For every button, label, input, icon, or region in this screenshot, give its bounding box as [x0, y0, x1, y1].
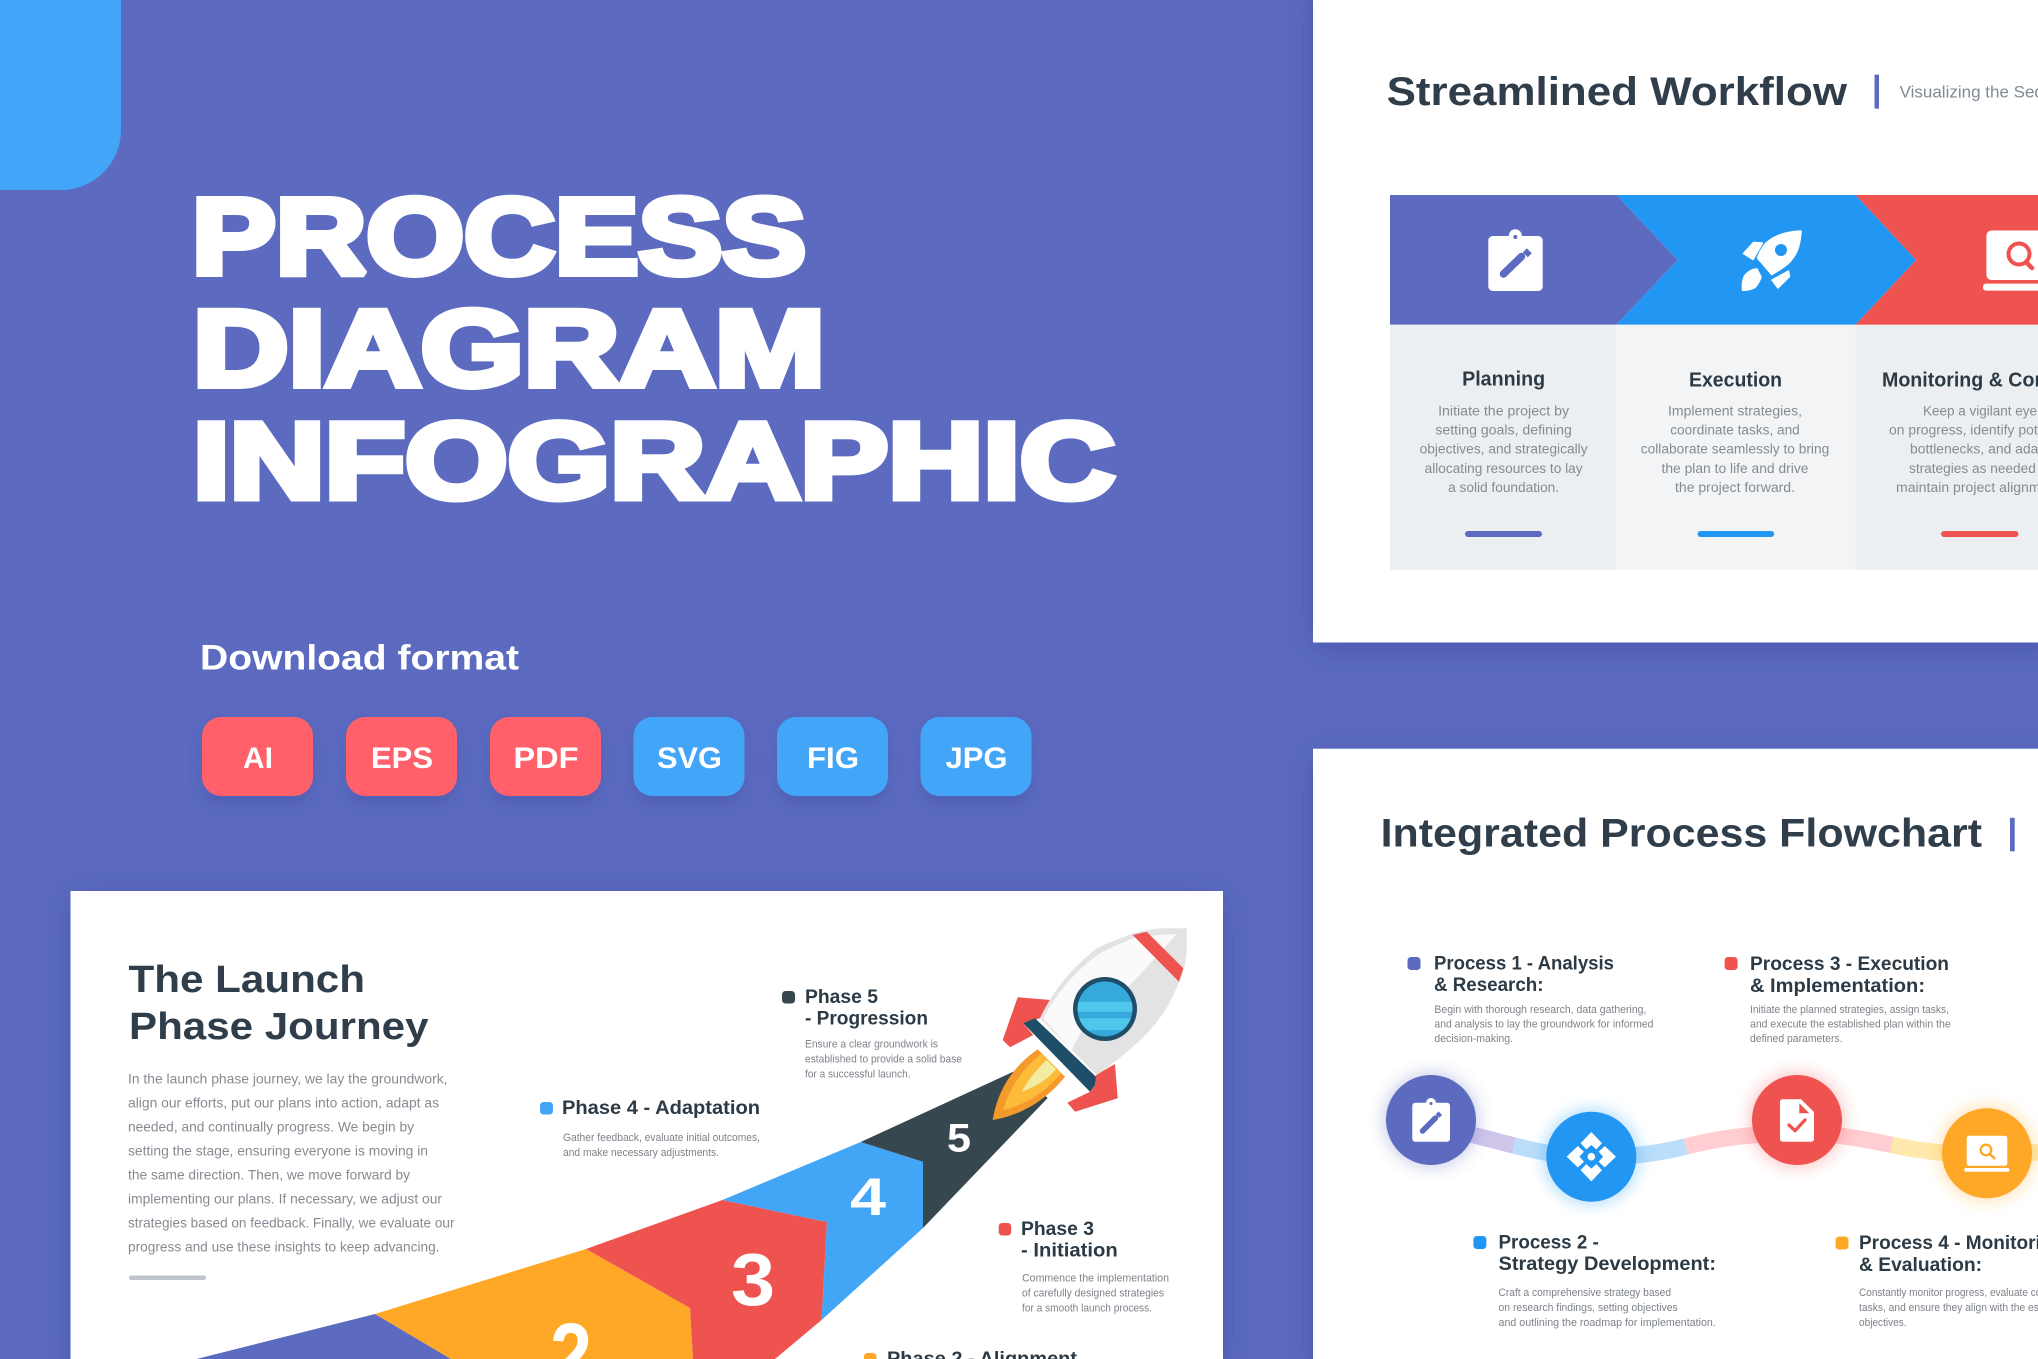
badge: PDF: PDF	[514, 742, 578, 775]
badge: SVG: SVG	[657, 742, 722, 775]
main title: DIAGRAM	[193, 288, 825, 408]
label: process 1: & Research:	[1434, 975, 1544, 996]
label: process 3: & Implementation:	[1750, 976, 1925, 997]
badge: PDF	[490, 717, 601, 796]
body text: setting the stage, ensuring everyone is moving in	[128, 1142, 428, 1158]
label: process 1: Process 1 - Analysis	[1434, 953, 1614, 974]
label: process 1: Begin with thorough research, data gathering,	[1434, 1004, 1646, 1016]
step: execution: the plan to life and drive	[1662, 461, 1808, 476]
label: process 4: & Evaluation:	[1859, 1255, 1982, 1276]
label: process 4: objectives.	[1859, 1317, 1907, 1329]
badge: JPG	[920, 717, 1032, 796]
step: execution	[1641, 369, 1829, 537]
corner accent	[0, 0, 121, 190]
label: process 2	[1473, 1232, 1716, 1329]
label: phase 3: for a smooth launch process.	[1022, 1302, 1152, 1314]
rocket body	[1040, 928, 1187, 1075]
number 3: 3	[731, 1238, 775, 1321]
rocket trail chart	[196, 1070, 1048, 1359]
rocket flame	[993, 1049, 1065, 1120]
main title	[192, 176, 1115, 521]
chevron: monitoring	[1856, 195, 2038, 325]
step: planning: objectives, and strategically	[1420, 442, 1588, 457]
label: process 2: Strategy Development:	[1498, 1254, 1716, 1275]
label: phase 4	[540, 1098, 760, 1159]
label: process 2: and outlining the roadmap for implementation.	[1498, 1317, 1716, 1329]
badge: EPS	[346, 717, 457, 796]
label: process 2: on research findings, setting objectives	[1498, 1302, 1678, 1314]
body text	[128, 1070, 455, 1254]
label: process 3: defined parameters.	[1750, 1033, 1842, 1045]
step: execution: the project forward.	[1675, 480, 1795, 495]
panel: streamlined workflow	[1313, 0, 2038, 642]
porthole	[1073, 977, 1137, 1041]
segment 1	[196, 1314, 451, 1359]
label: phase 5: for a successful launch.	[805, 1069, 910, 1081]
step: planning	[1420, 369, 1588, 537]
icon: clipboard	[1488, 229, 1543, 291]
label: process 3: Process 3 - Execution	[1750, 954, 1949, 975]
step: planning: allocating resources to lay	[1425, 461, 1583, 476]
badge: FIG	[777, 717, 888, 796]
label: process 3	[1725, 954, 1951, 1045]
badge: SVG	[634, 717, 744, 796]
panel heading: Streamlined Workflow	[1387, 70, 1848, 114]
body text: align our efforts, put our plans into action, adapt as	[128, 1094, 439, 1110]
body text: the same direction. Then, we move forward by	[128, 1166, 410, 1182]
label: process 1	[1408, 953, 1653, 1045]
number 4: 4	[850, 1168, 887, 1227]
rocket body highlight	[1043, 934, 1177, 1050]
segment 3	[586, 1200, 827, 1359]
label: phase 3: - Initiation	[1021, 1241, 1118, 1262]
step: execution: collaborate seamlessly to bring	[1641, 442, 1829, 457]
label: phase 5: Phase 5	[805, 987, 878, 1008]
segment 2	[375, 1249, 693, 1359]
download format heading: Download format	[200, 638, 519, 678]
label: process 1: decision-making.	[1434, 1033, 1513, 1045]
panel: launch phase journey	[70, 891, 1223, 1359]
body text: In the launch phase journey, we lay the groundwork,	[128, 1070, 448, 1086]
node 1: clipboard	[1386, 1075, 1476, 1165]
body text: progress and use these insights to keep advancing.	[128, 1238, 440, 1254]
segment 5	[861, 1070, 1048, 1228]
label: phase 3: Phase 3	[1021, 1219, 1094, 1240]
nose band	[1133, 932, 1183, 982]
chevron: execution	[1616, 195, 1916, 325]
label: phase 3: Commence the implementation	[1022, 1272, 1169, 1284]
body text: needed, and continually progress. We begin by	[128, 1118, 414, 1134]
label: process 2: Process 2 -	[1498, 1232, 1599, 1254]
accent bar	[129, 1276, 206, 1280]
main title: INFOGRAPHIC	[193, 400, 1115, 521]
icon: rocket	[1742, 231, 1801, 290]
number 5: 5	[947, 1116, 971, 1160]
label: phase 5: established to provide a solid base	[805, 1054, 962, 1066]
step: execution: Execution	[1689, 369, 1782, 391]
panel: integrated process flowchart	[1313, 749, 2038, 1359]
icon: rocket	[993, 928, 1187, 1120]
format badges	[202, 717, 1032, 796]
panel heading: Phase Journey	[129, 1006, 428, 1048]
heading divider	[1874, 75, 1879, 109]
chevron: planning	[1390, 195, 1678, 325]
step: monitoring and control: Keep a vigilant eye	[1923, 403, 2037, 418]
segment 4	[722, 1142, 923, 1320]
label: phase 4: and make necessary adjustments.	[563, 1147, 719, 1159]
label: process 1: and analysis to lay the groundwork for informed	[1434, 1018, 1653, 1030]
badge: AI: AI	[243, 742, 273, 775]
label: process 3: Initiate the planned strategies, assign tasks,	[1750, 1004, 1949, 1016]
panel heading: The Launch	[128, 959, 365, 1001]
node 2: diamonds	[1546, 1112, 1636, 1202]
label: phase 5: Ensure a clear groundwork is	[805, 1039, 938, 1051]
rocket base	[1023, 1018, 1096, 1092]
step: planning: a solid foundation.	[1448, 480, 1559, 495]
label: process 4	[1836, 1233, 2038, 1329]
step cards	[1390, 325, 2038, 570]
step: planning: Planning	[1462, 369, 1545, 391]
panel heading	[128, 959, 428, 1048]
label: process 3: and execute the established plan within the	[1750, 1018, 1951, 1030]
badge: JPG: JPG	[946, 742, 1008, 775]
label: phase 4: Phase 4 - Adaptation	[562, 1098, 760, 1119]
main title: PROCESS	[192, 176, 806, 296]
rocket fins	[1003, 997, 1118, 1112]
label: phase 4: Gather feedback, evaluate initial outcomes,	[563, 1132, 760, 1144]
badge: EPS: EPS	[371, 742, 433, 775]
label: phase 5: - Progression	[805, 1008, 928, 1030]
label: phase 3	[999, 1219, 1169, 1314]
node 4: laptop search	[1942, 1108, 2032, 1198]
step: execution: Implement strategies,	[1668, 403, 1802, 418]
step: monitoring and control	[1882, 369, 2038, 537]
body text: implementing our plans. If necessary, we adjust our	[128, 1190, 442, 1206]
step: planning: setting goals, defining	[1435, 422, 1572, 438]
heading divider	[2010, 818, 2015, 851]
step: execution: coordinate tasks, and	[1670, 422, 1800, 438]
badge: FIG: FIG	[807, 742, 859, 775]
node 3: document check	[1752, 1075, 1842, 1165]
label: phase 3: of carefully designed strategies	[1022, 1288, 1164, 1300]
panel heading: Integrated Process Flowchart	[1381, 812, 1982, 856]
body text: strategies based on feedback. Finally, we evaluate our	[128, 1214, 455, 1230]
label: process 2: Craft a comprehensive strategy based	[1498, 1287, 1671, 1299]
icon: laptop search	[1983, 230, 2038, 291]
badge: AI	[202, 717, 313, 796]
process ribbon	[1465, 1133, 2038, 1157]
step: planning: Initiate the project by	[1438, 403, 1569, 418]
label: phase 5	[782, 987, 962, 1081]
